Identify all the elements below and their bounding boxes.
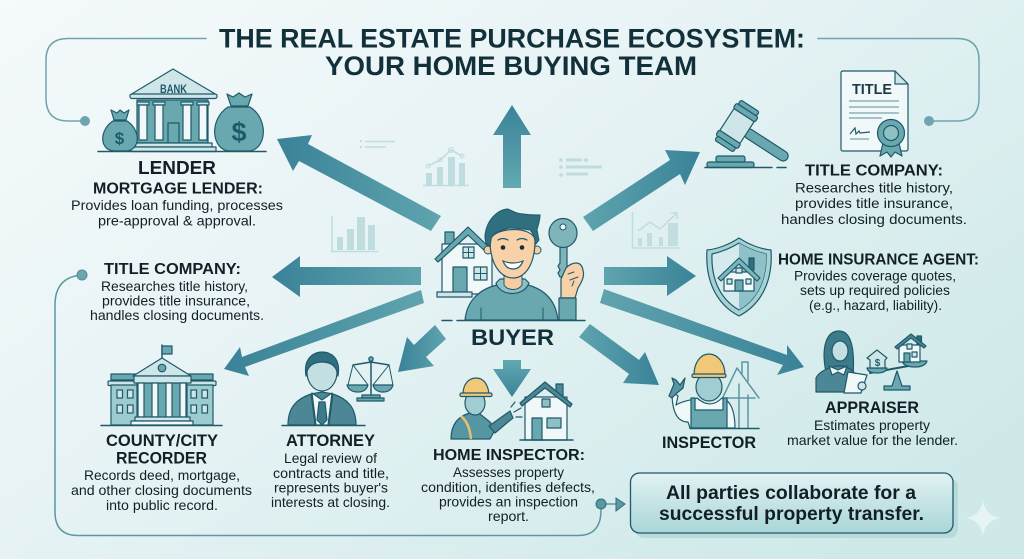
arrow: to home inspector — [493, 360, 531, 397]
text: lender description: pre-approval & approval. — [98, 212, 256, 228]
icon: title document: TITLE — [852, 82, 892, 98]
arrow: to title company — [583, 150, 700, 231]
title: YOUR HOME BUYING TEAM — [325, 51, 697, 81]
arrow: to appraiser — [600, 289, 804, 375]
arrow: to insurance agent — [604, 256, 696, 296]
icon: shield with house — [707, 238, 771, 316]
callout — [630, 473, 958, 538]
heading: mortgage lender: MORTGAGE LENDER: — [93, 180, 263, 198]
icon: courthouse — [101, 345, 222, 426]
icon: key and hand — [549, 218, 584, 320]
text: recorder description: and other closing documents — [71, 482, 252, 498]
icon: inspector with flashlight and house — [451, 378, 573, 440]
text: title company description: provides title insurance, — [102, 292, 250, 308]
panel: appraiser — [787, 331, 958, 448]
heading: title company: TITLE COMPANY: — [805, 162, 943, 180]
heading: inspector: INSPECTOR — [662, 433, 756, 452]
heading: home insurance agent: HOME INSURANCE AGENT: — [778, 252, 979, 268]
ground line — [442, 320, 585, 322]
arrow: to recorder — [224, 290, 424, 376]
text: attorney description — [271, 450, 390, 510]
icon: bank and money bags: $ — [115, 129, 125, 148]
connector: team loop to callout — [55, 270, 625, 536]
connector: title to lender — [46, 38, 206, 126]
icon: buyer figure — [465, 209, 558, 320]
arrow: to attorney — [398, 325, 446, 372]
text: title company description — [90, 278, 264, 323]
icon: sparkle — [966, 501, 1000, 536]
arrow: to left title company — [272, 256, 421, 297]
text: insurance description: (e.g., hazard, liability). — [809, 297, 942, 313]
icon: title document — [841, 71, 908, 157]
heading: attorney: ATTORNEY — [286, 432, 375, 450]
text: lender description — [71, 197, 283, 228]
text: title company description: Researches title history, — [101, 278, 248, 294]
panel: home insurance agent — [707, 238, 979, 316]
arrow: to lender — [277, 135, 441, 231]
text: appraiser description: Estimates property — [814, 417, 930, 433]
text: insurance description: Provides coverage quotes, — [794, 268, 956, 284]
callout: All parties collaborate for a — [666, 482, 916, 504]
icon: attorney with scales — [282, 352, 393, 426]
callout: successful property transfer. — [659, 503, 924, 525]
text: appraiser description: market value for the lender. — [787, 432, 958, 448]
text: home inspector description: condition, identifies defects, — [421, 479, 595, 495]
text: attorney description: interests at closing. — [271, 494, 390, 510]
connector: title to title company — [818, 38, 979, 126]
text: insurance description — [794, 268, 956, 313]
panel: title company right — [705, 71, 967, 227]
panel: title company left — [90, 261, 264, 323]
heading: county city recorder: RECORDER — [116, 450, 207, 468]
text: title company description: Researches title history, — [795, 180, 953, 196]
text: recorder description: into public record. — [106, 497, 218, 513]
text: home inspector description: report. — [488, 508, 529, 524]
arrow: up — [493, 105, 531, 188]
icon: bank and money bags: BANK — [160, 84, 188, 96]
text: attorney description: Legal review of — [284, 450, 377, 466]
heading: appraiser: APPRAISER — [825, 399, 919, 417]
text: home inspector description — [421, 464, 595, 524]
panel: inspector — [662, 354, 759, 452]
heading: county city recorder: COUNTY/CITY — [106, 432, 218, 450]
arrow: to inspector — [579, 324, 659, 385]
text: title company description: handles closing documents. — [781, 211, 967, 227]
icon: bank and money bags: $ — [231, 117, 247, 147]
panel: county city recorder — [71, 345, 252, 513]
icon: house — [435, 227, 492, 297]
text: lender description: Provides loan funding, processes — [71, 197, 283, 213]
panel: lender — [71, 69, 283, 228]
heading: title company: TITLE COMPANY: — [104, 261, 241, 278]
text: title company description — [781, 180, 967, 227]
heading: lender: LENDER — [138, 157, 216, 178]
icon: appraiser with scale: $ — [875, 358, 881, 369]
heading: home inspector: HOME INSPECTOR: — [433, 447, 585, 464]
text: recorder description — [71, 467, 252, 513]
text: title company description: handles closing documents. — [90, 307, 264, 323]
icon: inspector with wrench and house frame — [669, 354, 759, 428]
panel: buyer — [435, 209, 585, 350]
icon: gavel — [705, 99, 800, 179]
icon: appraiser with scale — [816, 331, 927, 393]
text: appraiser description — [787, 417, 958, 448]
title: THE REAL ESTATE PURCHASE ECOSYSTEM: — [219, 24, 805, 54]
text: home inspector description: provides an inspection — [439, 494, 578, 510]
faint decorative charts — [332, 140, 680, 252]
arrows from buyer — [224, 105, 804, 397]
text: attorney description: contracts and title, — [273, 465, 389, 481]
text: recorder description: Records deed, mortgage, — [84, 467, 240, 483]
panel: home inspector — [421, 378, 595, 524]
text: insurance description: sets up required policies — [800, 282, 950, 298]
text: attorney description: represents buyer's — [274, 480, 388, 496]
panel: attorney — [271, 352, 393, 510]
text: home inspector description: Assesses property — [453, 464, 564, 480]
title — [219, 24, 805, 81]
heading: buyer: BUYER — [471, 325, 554, 350]
heading: county city recorder — [106, 432, 218, 468]
text: title company description: provides title insurance, — [795, 195, 953, 211]
icon: bank and money bags — [98, 69, 266, 152]
